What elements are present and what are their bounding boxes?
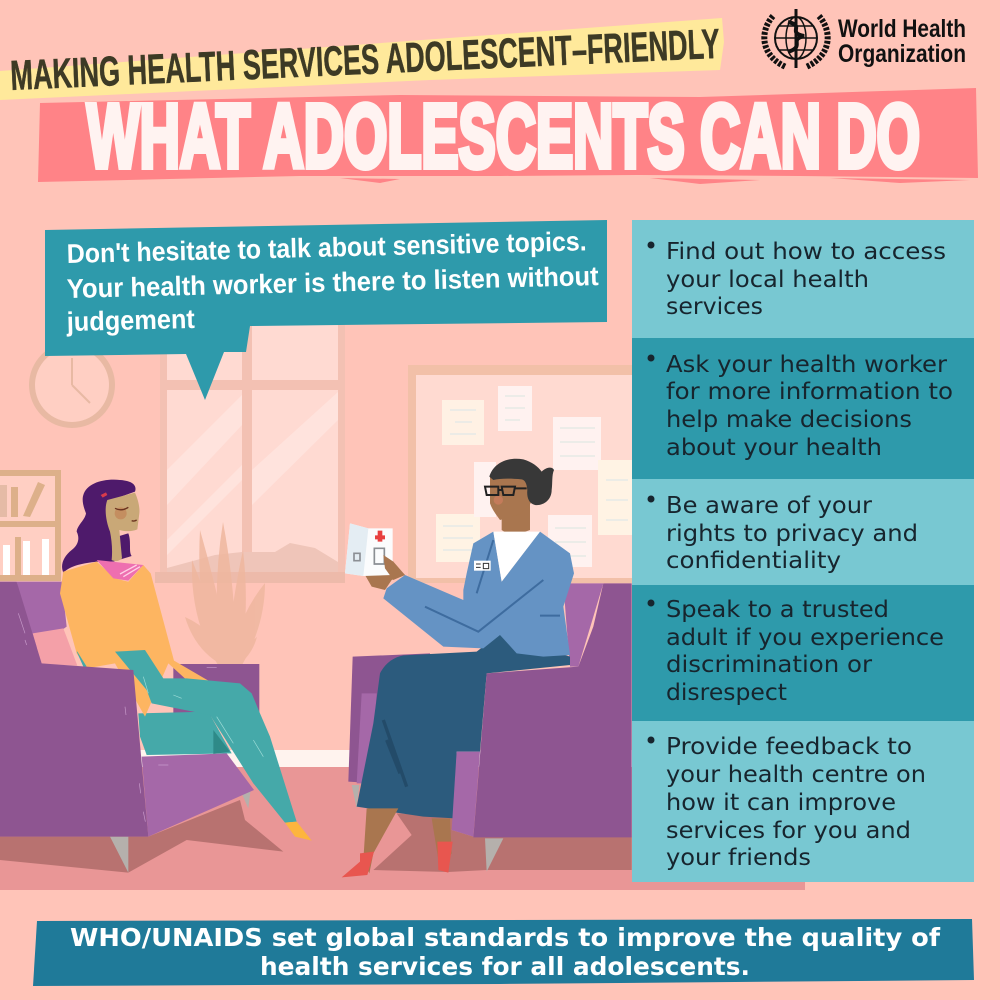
- jacket folds: [425, 540, 560, 632]
- item: trusted adult: Speak to a trusted: [666, 597, 889, 623]
- sofa legs: [110, 789, 251, 873]
- footer text: health services for all adolescents.: [260, 952, 750, 981]
- jacket: [383, 532, 574, 657]
- item: trusted adult: disrespect: [666, 680, 787, 706]
- title banner: [38, 87, 978, 187]
- neck: [502, 497, 530, 537]
- item: access services: Find out how to access: [666, 239, 946, 265]
- illustration: adolescent on sofa: [0, 480, 312, 873]
- name badge: [474, 561, 491, 571]
- seat: [142, 753, 254, 837]
- item: trusted adult: discrimination or: [666, 652, 873, 678]
- item: provide feedback: Provide feedback to: [666, 734, 912, 760]
- sofa far arm: [348, 653, 430, 787]
- shoe: [285, 822, 312, 841]
- plant: [185, 522, 265, 665]
- far arm: [173, 664, 259, 717]
- bubble text: [65, 226, 599, 337]
- pillow: [33, 628, 77, 666]
- booklet: [345, 523, 393, 576]
- scarf: [97, 560, 143, 581]
- logo: World Health Organization: [764, 9, 966, 68]
- face: [490, 473, 531, 520]
- item: ask for information: about your health: [666, 435, 882, 461]
- item: provide feedback: how it can improve: [666, 790, 896, 816]
- legs: [363, 808, 452, 873]
- shoes: [342, 842, 453, 877]
- floor shadow: [0, 800, 283, 873]
- item: provide feedback: your friends: [666, 845, 811, 871]
- brush streaks: [340, 178, 970, 184]
- sofa legs: [352, 785, 503, 872]
- sofa seat and arm: [452, 752, 480, 837]
- item: provide feedback: services for you and: [666, 818, 911, 844]
- bubble text: Don't hesitate to talk about sensitive topics.: [66, 226, 587, 269]
- brush panel: [38, 88, 978, 182]
- item: trusted adult: [632, 585, 974, 721]
- sweater: [60, 562, 208, 717]
- shirt: [493, 532, 540, 582]
- organization name: World Health: [838, 15, 966, 43]
- sofa back: [17, 582, 67, 650]
- item: provide feedback: [632, 721, 974, 882]
- item: rights to privacy: confidentiality: [666, 548, 841, 574]
- hair clip: [101, 492, 107, 498]
- illustration: health worker on sofa: [342, 459, 632, 877]
- upper leg: [77, 650, 297, 823]
- item: provide feedback: your health centre on: [666, 762, 926, 788]
- hands: [365, 555, 405, 590]
- shine marks: [143, 677, 263, 757]
- notice board: [408, 365, 632, 583]
- footer panel: [33, 919, 974, 986]
- yellow strip: [0, 18, 724, 100]
- panel: actions list: [632, 220, 974, 882]
- item: rights to privacy: [632, 479, 974, 585]
- item: rights to privacy: Be aware of your: [666, 493, 873, 519]
- item: rights to privacy: rights to privacy and: [666, 521, 918, 547]
- item: ask for information: for more information to: [666, 379, 953, 405]
- banner: subtitle: [0, 18, 724, 100]
- sofa back: [563, 583, 603, 667]
- item: ask for information: Ask your health worker: [666, 352, 948, 378]
- red cross: [375, 531, 385, 542]
- logo: World Health Organization: Organization: [838, 40, 966, 68]
- icon: wall clock: [29, 342, 115, 428]
- item: trusted adult: adult if you experience: [666, 625, 944, 651]
- item: access services: your local health: [666, 267, 869, 293]
- icon: WHO emblem: [764, 9, 828, 68]
- window: [155, 315, 345, 583]
- glasses: [485, 487, 527, 495]
- finger over booklet: [383, 555, 405, 580]
- floor: [0, 767, 805, 890]
- sofa shine marks: [18, 613, 217, 822]
- blush and eye: [115, 507, 127, 519]
- footer banner: [33, 919, 974, 986]
- skirting board: [0, 750, 640, 767]
- lower leg: [138, 712, 232, 755]
- booklet icons: [354, 548, 384, 564]
- bubble shape: [45, 220, 607, 400]
- bubble text: Your health worker is there to listen without: [66, 261, 599, 304]
- hair: [62, 480, 136, 573]
- floor shadow: [373, 813, 632, 872]
- footer text: [70, 923, 941, 981]
- bubble text: judgement: [65, 304, 195, 337]
- callout: speech bubble: [45, 220, 607, 400]
- item: ask for information: help make decisions: [666, 407, 912, 433]
- footer text: WHO/UNAIDS set global standards to improve the quality of: [70, 923, 941, 952]
- bookshelf: [0, 470, 61, 581]
- item: access services: services: [666, 294, 763, 320]
- sofa front arm: [0, 582, 148, 837]
- hair: [489, 459, 554, 505]
- skirt: [357, 633, 570, 818]
- face and neck: [106, 493, 139, 561]
- skirt folds: [383, 720, 407, 787]
- item: access services: [632, 220, 974, 338]
- item: ask for information: [632, 338, 974, 479]
- illustration: clinic room background: [0, 315, 805, 890]
